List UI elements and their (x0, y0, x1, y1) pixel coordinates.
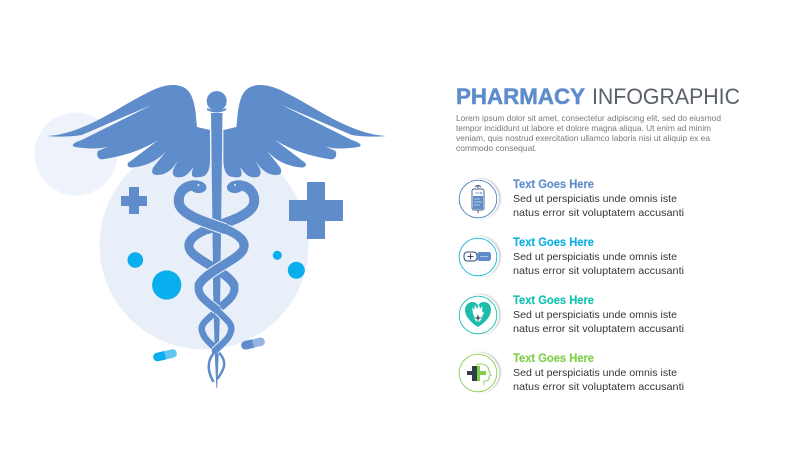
icon badge: heart and hands (458, 294, 501, 336)
large plus (289, 182, 343, 239)
blue capsule (240, 337, 266, 350)
item 1 text: Sed ut perspiciatis unde omnis iste (513, 193, 677, 205)
caduceus emblem (47, 85, 386, 388)
icon badge: iv bag (458, 178, 501, 220)
item 4 heading: Text Goes Here (513, 353, 594, 365)
intro paragraph: commodo consequat. (456, 143, 537, 153)
item 2 text (513, 251, 684, 277)
item 1 text (513, 193, 684, 219)
item 3 text: natus error sit voluptatem accusanti (513, 323, 684, 335)
right wing (223, 85, 386, 177)
intro paragraph: tempor incididunt ut labore et dolore magna aliqua. Ut enim ad minim (456, 123, 711, 133)
staff ball (207, 91, 227, 111)
item 3 text (513, 309, 684, 335)
small plus (121, 187, 147, 214)
staff (211, 113, 222, 388)
background circle: small (34, 112, 118, 196)
item 1 heading: Text Goes Here (513, 179, 594, 191)
title: INFOGRAPHIC (592, 84, 740, 109)
title: PHARMACY (456, 84, 585, 109)
blue dots (128, 251, 305, 300)
item 2 text: Sed ut perspiciatis unde omnis iste (513, 251, 677, 263)
item 2: thermometer (458, 236, 684, 278)
intro paragraph (456, 113, 721, 153)
snake heads (189, 180, 245, 194)
snake: left-head strand halo (179, 185, 244, 351)
title (456, 84, 740, 109)
item 4 text: natus error sit voluptatem accusanti (513, 381, 684, 393)
snake: left-head strand (179, 185, 244, 381)
item 4: head with plus (458, 352, 684, 394)
item 2 heading: Text Goes Here (513, 237, 594, 249)
icon badge: thermometer (458, 236, 501, 278)
item 1 text: natus error sit voluptatem accusanti (513, 207, 684, 219)
left wing (47, 85, 210, 177)
intro paragraph: Lorem ipsum dolor sit amet, consectetur adipiscing elit, sed do eiusmod (456, 113, 721, 123)
item 2 text: natus error sit voluptatem accusanti (513, 265, 684, 277)
intro paragraph: veniam, quis nostrud exercitation ullamco laboris nisi ut aliquip ex ea (456, 133, 710, 143)
item 4 text: Sed ut perspiciatis unde omnis iste (513, 367, 677, 379)
cyan capsule (152, 348, 178, 362)
item 1: iv bag (458, 178, 684, 220)
staff segments behind strand (213, 236, 221, 296)
icon badge: head with plus (458, 352, 501, 394)
item 3 text: Sed ut perspiciatis unde omnis iste (513, 309, 677, 321)
background circle: large (100, 140, 308, 350)
item 3: heart and hands (458, 294, 684, 336)
item 3 heading: Text Goes Here (513, 295, 594, 307)
snake: right-head strand (189, 185, 254, 378)
staff collar (207, 109, 226, 112)
item 4 text (513, 367, 684, 393)
